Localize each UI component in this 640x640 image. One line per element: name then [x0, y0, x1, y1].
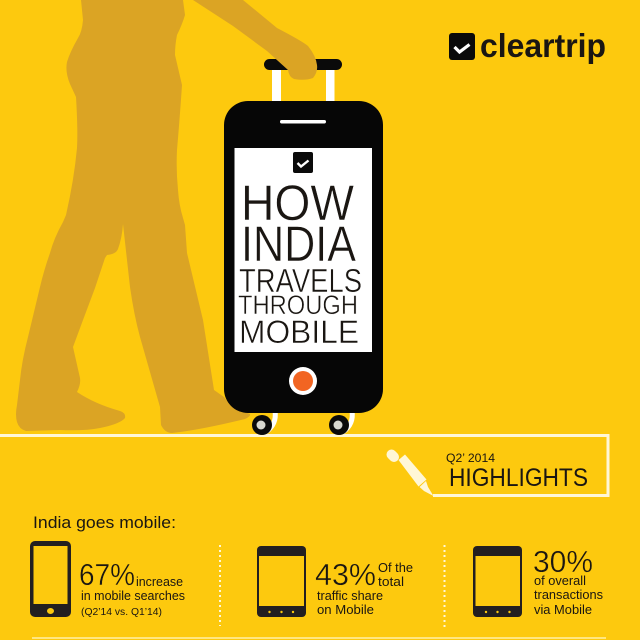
- title: HOW: [241, 175, 355, 231]
- highlights heading: [446, 451, 588, 492]
- title: [238, 175, 362, 350]
- title: MOBILE: [239, 314, 359, 350]
- stat 3 text: via Mobile: [534, 602, 592, 617]
- stat 1 text: (Q2’14 vs. Q1’14): [81, 606, 162, 618]
- stat 2 text: total: [378, 574, 404, 589]
- stat 1 phone icon: [30, 541, 71, 617]
- arm and hand: [193, 0, 317, 80]
- highlights heading: HIGHLIGHTS: [449, 464, 588, 492]
- stat 1 text: [79, 557, 185, 618]
- cleartrip logo: cleartrip: [480, 27, 606, 64]
- highlights heading: Q2’ 2014: [446, 451, 495, 465]
- phone speaker: [280, 120, 326, 124]
- stat 2 tablet icon: [257, 546, 306, 617]
- stat 2 text: [315, 557, 413, 617]
- phone home button: [289, 367, 317, 395]
- stat 3 text: transactions: [534, 587, 603, 602]
- stat 3 text: [533, 544, 603, 617]
- traveller silhouette: [16, 0, 250, 433]
- phone suitcase body: [224, 101, 383, 413]
- stat 1 text: increase: [136, 575, 183, 589]
- suitcase wheels: [252, 411, 352, 435]
- ground line and highlights frame: [0, 436, 608, 496]
- title: THROUGH: [238, 290, 358, 320]
- title: TRAVELS: [239, 262, 362, 299]
- section heading: India goes mobile:: [33, 513, 176, 532]
- phone screen: [234, 148, 372, 352]
- title: INDIA: [241, 216, 357, 272]
- stat 2 text: on Mobile: [317, 602, 374, 617]
- stat 1 text: in mobile searches: [81, 588, 185, 603]
- stat 1 text: 67%: [79, 557, 135, 592]
- stat 3 text: 30%: [533, 544, 593, 579]
- stat 3 tablet icon: [473, 546, 522, 617]
- highlighter pen icon: [392, 454, 434, 496]
- stat 2 text: Of the: [378, 560, 413, 575]
- suitcase handle: [264, 59, 342, 104]
- stat 3 text: of overall: [534, 573, 586, 588]
- stat 2 text: traffic share: [317, 588, 383, 603]
- stat 2 text: 43%: [315, 557, 376, 592]
- screen check icon: [293, 152, 313, 173]
